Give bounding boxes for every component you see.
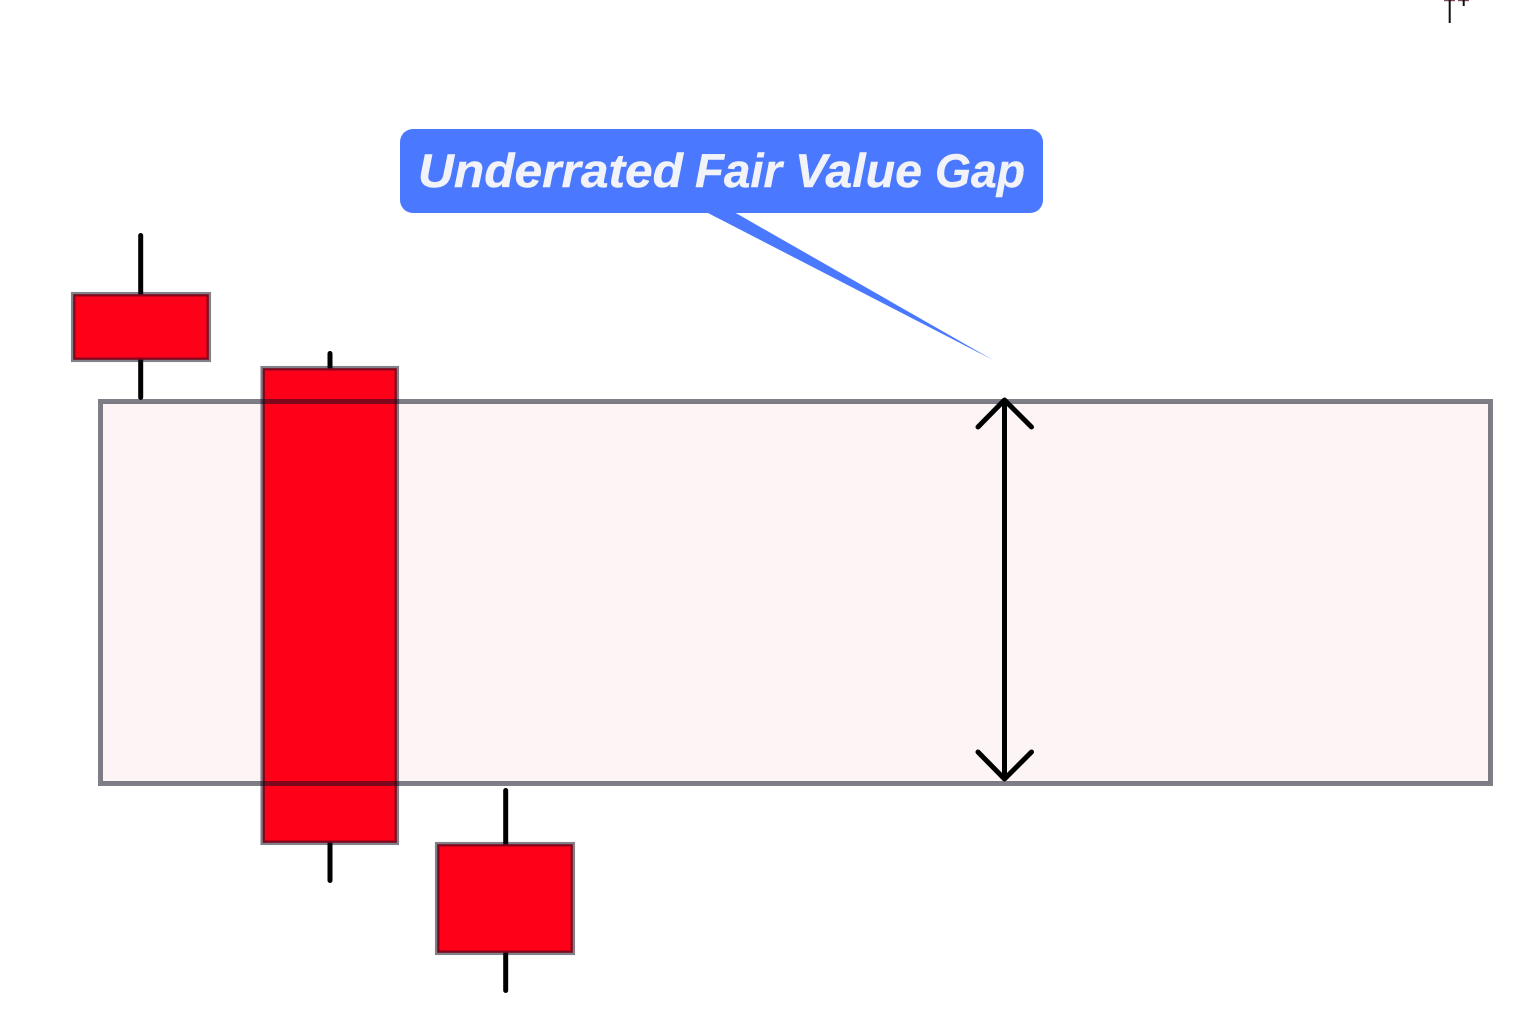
arrow: double-headed gap height	[978, 400, 1032, 779]
small candle fragment: top right edge	[1444, 0, 1469, 23]
candle 2: large bearish displacement candle	[263, 354, 397, 880]
callout text: Fair	[695, 144, 785, 197]
candle 3: bearish candle below the gap	[437, 790, 573, 990]
callout pointer	[706, 212, 993, 360]
callout text: Gap	[935, 144, 1025, 197]
callout box	[400, 129, 1043, 213]
callout text: Underrated	[418, 144, 684, 197]
candle 1: small bearish candle	[73, 236, 209, 398]
fair value gap zone border	[100, 402, 1490, 784]
callout: Underrated Fair Value Gap	[400, 129, 1043, 360]
callout text: Value	[795, 144, 922, 197]
fair value gap zone fill	[100, 402, 1490, 784]
